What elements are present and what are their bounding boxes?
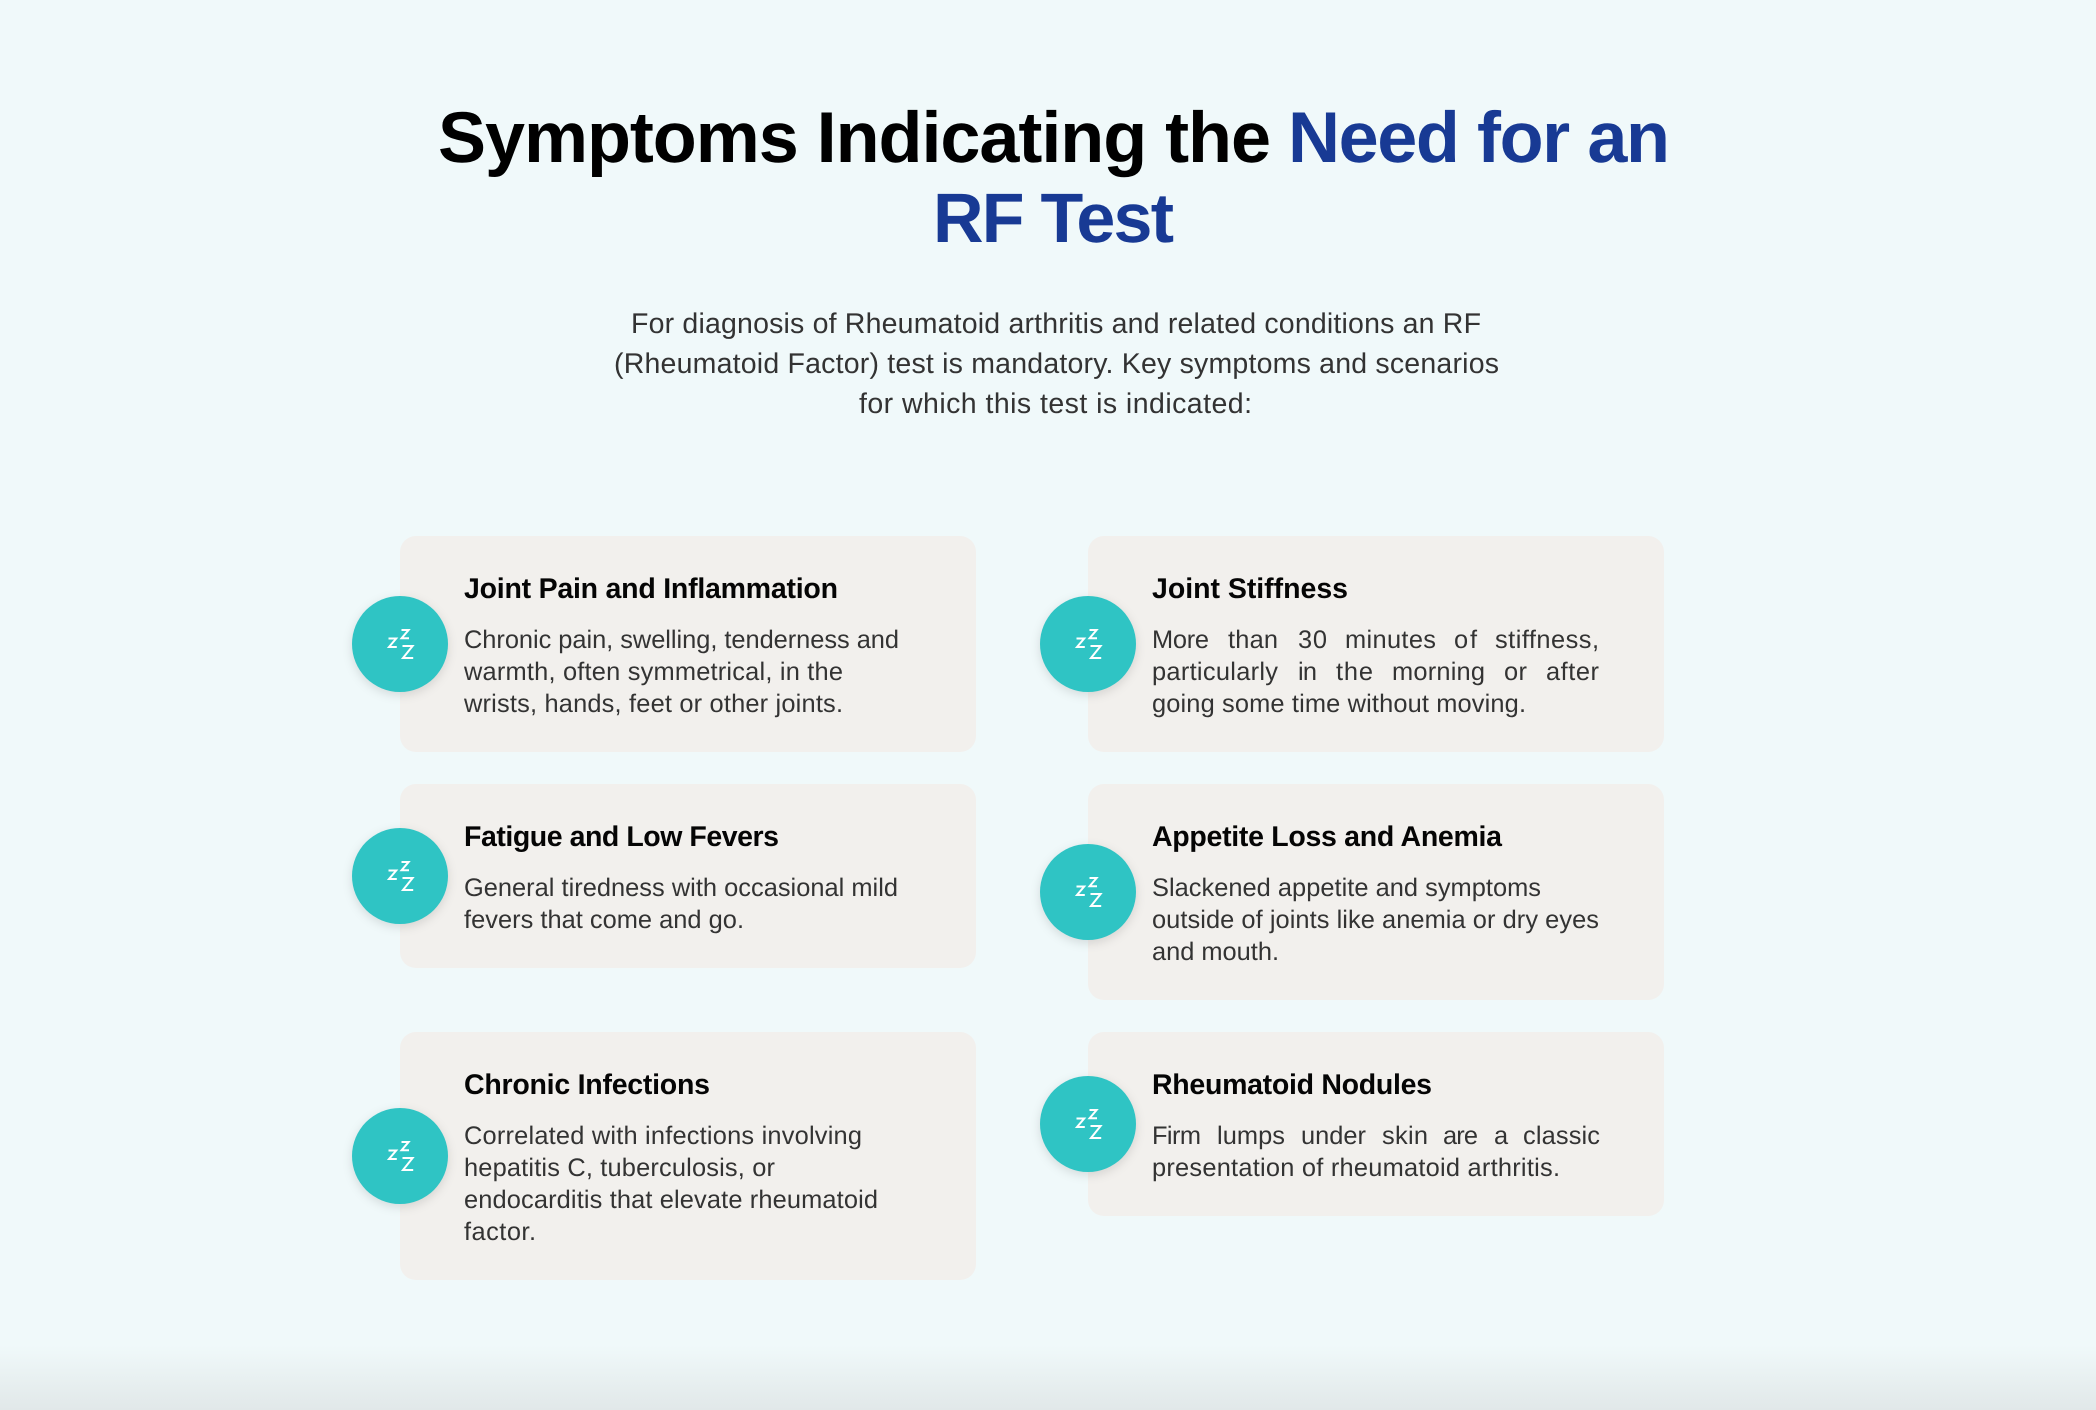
description — [463, 626, 899, 718]
description: or — [1504, 658, 1528, 686]
panel: fatigue and low fevers — [352, 784, 976, 968]
title — [438, 98, 1670, 257]
intro paragraph: For diagnosis of Rheumatoid arthritis and related conditions an RF — [631, 308, 1481, 340]
description: going some time without moving. — [1152, 690, 1526, 718]
card background — [1088, 536, 1664, 752]
description: the — [1336, 658, 1373, 686]
panel: joint stiffness — [1040, 536, 1664, 752]
description — [464, 874, 898, 934]
description: outside of joints like anemia or dry eyes — [1152, 906, 1599, 934]
description: stiffness, — [1495, 626, 1599, 654]
description: than — [1228, 626, 1278, 654]
description: Firm — [1152, 1122, 1201, 1150]
description: a — [1494, 1122, 1509, 1150]
panel: rheumatoid nodules — [1040, 1032, 1664, 1216]
heading: Chronic Infections — [464, 1069, 710, 1101]
card background — [400, 784, 976, 968]
heading: Rheumatoid Nodules — [1152, 1069, 1432, 1101]
description: Chronic pain, swelling, tenderness and — [464, 626, 899, 654]
description: wrists, hands, feet or other joints. — [463, 690, 843, 718]
description: Slackened appetite and symptoms — [1152, 874, 1541, 902]
heading: Joint Stiffness — [1152, 573, 1348, 605]
description: particularly — [1152, 658, 1278, 686]
description: More — [1152, 626, 1209, 654]
panel: appetite loss and anemia — [1040, 784, 1664, 1000]
card background — [400, 1032, 976, 1280]
intro paragraph — [614, 308, 1499, 420]
icon: sleep zzz — [352, 596, 448, 692]
description: after — [1546, 658, 1600, 686]
title: RF Test — [933, 179, 1174, 257]
description: endocarditis that elevate rheumatoid — [464, 1186, 878, 1214]
description: of — [1454, 626, 1478, 654]
description: warmth, often symmetrical, in the — [463, 658, 843, 686]
description: under — [1301, 1122, 1367, 1150]
description: fevers that come and go. — [464, 906, 744, 934]
description: lumps — [1217, 1122, 1285, 1150]
description: skin — [1382, 1122, 1428, 1150]
icon: sleep zzz — [1040, 596, 1136, 692]
title: Need for an — [1288, 98, 1670, 178]
description: factor. — [464, 1218, 536, 1246]
description — [1152, 874, 1599, 966]
description: 30 — [1298, 626, 1327, 654]
intro paragraph: (Rheumatoid Factor) test is mandatory. Key symptoms and scenarios — [614, 348, 1499, 380]
panel: chronic infections — [352, 1032, 976, 1280]
description: classic — [1523, 1122, 1600, 1150]
description: hepatitis C, tuberculosis, or — [464, 1154, 776, 1182]
panel: joint pain and inflammation — [352, 536, 976, 752]
card background — [1088, 1032, 1664, 1216]
description — [464, 1122, 878, 1246]
icon: sleep zzz — [352, 1108, 448, 1204]
card background — [400, 536, 976, 752]
icon: sleep zzz — [1040, 1076, 1136, 1172]
description: Correlated with infections involving — [464, 1122, 862, 1150]
icon: sleep zzz — [1040, 844, 1136, 940]
description: morning — [1392, 658, 1485, 686]
description: are — [1443, 1122, 1478, 1150]
description — [1152, 626, 1600, 718]
description: General tiredness with occasional mild — [464, 874, 898, 902]
description — [1152, 1122, 1600, 1182]
heading: Appetite Loss and Anemia — [1152, 821, 1503, 853]
card background — [1088, 784, 1664, 1000]
intro paragraph: for which this test is indicated: — [859, 388, 1252, 420]
heading: Joint Pain and Inflammation — [464, 573, 838, 605]
heading: Fatigue and Low Fevers — [464, 821, 779, 853]
description: minutes — [1345, 626, 1436, 654]
title: Symptoms Indicating the — [438, 98, 1271, 178]
description: presentation of rheumatoid arthritis. — [1152, 1154, 1560, 1182]
description: in — [1298, 658, 1317, 686]
description: and mouth. — [1152, 938, 1279, 966]
icon: sleep zzz — [352, 828, 448, 924]
